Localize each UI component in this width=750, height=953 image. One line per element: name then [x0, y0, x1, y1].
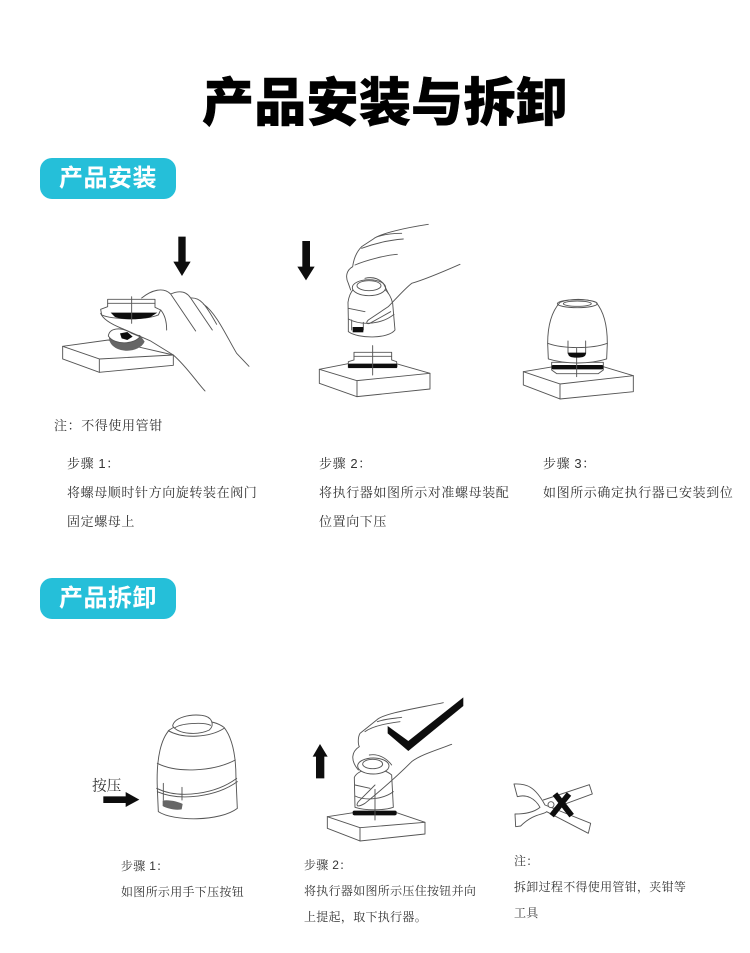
- text: install step 1: [67, 456, 257, 529]
- section heading: removal: 产品拆卸: [59, 585, 157, 612]
- text: install step 2: 将执行器如图所示对准螺母装配: [319, 485, 509, 500]
- text: removal step 2: 步骤 2：: [304, 858, 352, 872]
- icon: arrow right: [103, 792, 139, 807]
- illustration: removal step 2: [313, 697, 463, 841]
- text: removal note: 注：: [514, 854, 539, 868]
- icon: actuator: [348, 283, 395, 337]
- text: install step 3: [543, 456, 733, 500]
- text: install step 2: 步骤 2：: [319, 456, 372, 471]
- text: removal note: 拆卸过程不得使用管钳，夹钳等: [514, 880, 686, 894]
- icon: actuator body: [548, 299, 607, 363]
- text: install step 3: 如图所示确定执行器已安装到位: [543, 485, 733, 500]
- text: removal step 1: [121, 859, 244, 899]
- icon: check mark: [388, 697, 463, 751]
- section heading: removal: [40, 578, 176, 619]
- text: removal note: 工具: [514, 906, 539, 920]
- icon: nut: [552, 362, 603, 374]
- title: 产品安装与拆卸: [202, 75, 568, 133]
- icon: block: [327, 813, 425, 841]
- illustration: install step 1: [63, 237, 249, 391]
- text: removal step 2: 将执行器如图所示压住按钮并向: [304, 884, 476, 898]
- note: no pliers: 注：不得使用管钳: [54, 418, 163, 433]
- section heading: install: [40, 158, 176, 199]
- icon: nut: [353, 811, 397, 815]
- text: removal step 1: 如图所示用手下压按钮: [121, 885, 244, 899]
- text: removal note: [514, 854, 686, 920]
- icon: block: [319, 363, 430, 397]
- section heading: install: 产品安装: [59, 165, 157, 192]
- icon: arrow up: [313, 744, 328, 778]
- text: removal step 2: [304, 858, 476, 924]
- icon: block: [63, 340, 173, 372]
- text: install step 1: 步骤 1：: [67, 456, 120, 471]
- icon: actuator: [354, 769, 393, 810]
- icon: actuator: [157, 721, 237, 819]
- icon: nut on valve: [109, 333, 145, 351]
- icon: nut in hand: [101, 299, 161, 319]
- illustration: pliers crossed out: [514, 784, 592, 833]
- text: install step 1: 固定螺母上: [67, 514, 135, 529]
- icon: arrow down: [297, 241, 315, 280]
- icon: block: [523, 367, 633, 399]
- icon: pliers: [514, 784, 591, 833]
- text: removal step 1: 步骤 1：: [121, 859, 169, 873]
- illustration: removal step 1: [92, 715, 237, 819]
- illustration: install step 2: [297, 224, 460, 397]
- icon: arrow down: [173, 237, 191, 276]
- icon: hand: [347, 224, 460, 324]
- icon: hand: [353, 703, 452, 806]
- icon: hand: [101, 290, 249, 391]
- arrow label: 按压: [92, 778, 122, 795]
- text: removal step 2: 上提起，取下执行器。: [304, 910, 427, 924]
- text: install step 2: 位置向下压: [319, 514, 387, 529]
- illustration: install step 3: [523, 299, 633, 399]
- icon: cross mark: [552, 794, 572, 816]
- text: install step 1: 将螺母顺时针方向旋转装在阀门: [67, 485, 257, 500]
- text: install step 3: 步骤 3：: [543, 456, 596, 471]
- text: install step 2: [319, 456, 509, 529]
- icon: nut: [348, 352, 397, 368]
